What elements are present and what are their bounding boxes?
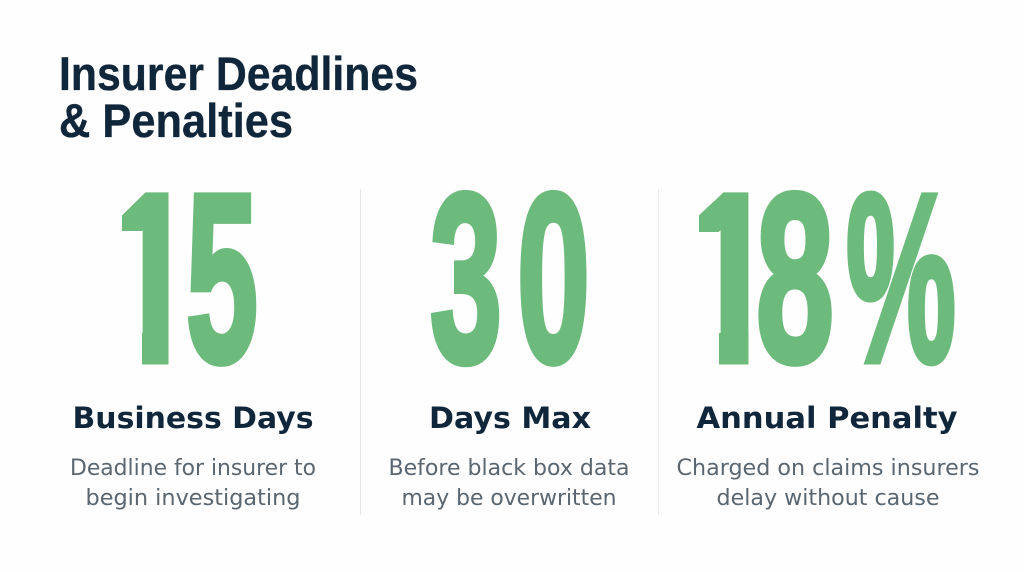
big number: 30: 0 — [517, 144, 590, 412]
big number: 18% — [699, 190, 955, 367]
heading: annual penalty: Annual Penalty — [696, 401, 958, 435]
description: annual penalty — [676, 456, 980, 511]
description: days max: Before black box data — [388, 456, 630, 481]
description: business days: begin investigating — [86, 486, 300, 511]
big number: 15 — [122, 192, 256, 367]
title: Insurer Deadlines — [59, 47, 418, 100]
big number: 30: 3 — [430, 144, 502, 412]
panel: 18% annual penalty — [678, 190, 978, 510]
title: & Penalties — [59, 94, 293, 147]
description: business days — [70, 456, 316, 511]
description: days max: may be overwritten — [402, 486, 616, 511]
heading: days max: Days Max — [429, 401, 591, 435]
big number: 18%: 8 — [756, 144, 834, 412]
panel: 30 days max — [388, 144, 630, 511]
title — [59, 47, 418, 147]
big number: 15: 5 — [186, 144, 258, 412]
description: days max — [388, 456, 630, 511]
description: business days: Deadline for insurer to — [70, 456, 316, 481]
big number: 18%: 1 — [684, 144, 777, 412]
heading: business days: Business Days — [72, 401, 314, 435]
description: annual penalty: Charged on claims insurers — [676, 456, 980, 481]
panel: 15 business days — [72, 192, 315, 510]
big number: 15: 1 — [108, 144, 196, 412]
description: annual penalty: delay without cause — [716, 486, 940, 511]
